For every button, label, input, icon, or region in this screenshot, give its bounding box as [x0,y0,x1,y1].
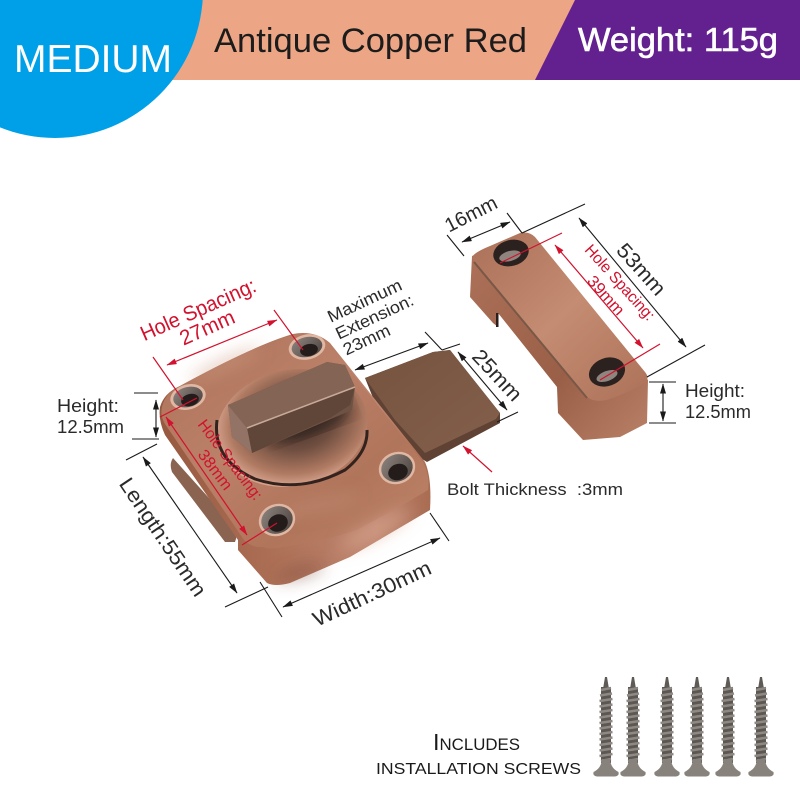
badge: blue quarter circle [0,0,203,138]
includes label: INSTALLATION SCREWS [376,761,581,778]
strike top face [472,232,648,401]
dimension: strike width 16mm [441,192,585,256]
dimension: maximum extension: 23mm [340,321,393,359]
dimension: hole spacing 39mm: 39mm [583,273,627,319]
dimension: maximum extension [324,276,442,370]
bolt [365,350,500,462]
dimension: strike length 53mm [579,218,705,377]
plate top face [161,334,428,548]
dimension: bolt width 25mm [442,344,526,422]
callout: bolt thickness: Bolt Thickness :3mm [447,481,623,499]
dimension: hole spacing 27mm [137,274,303,417]
dimension: height left: 12.5mm [57,416,124,437]
dimension: length 55mm: Length:55mm [114,474,211,601]
dimension: length 55mm [114,444,268,607]
dimension: hole spacing 39mm [500,233,660,380]
dimension: height left: Height: [57,395,119,416]
screws [593,677,774,776]
dimension: hole spacing 39mm: Hole Spacing: [581,242,658,324]
strike holes [490,236,629,391]
top banner: peach band [150,0,580,80]
strike edge [474,262,587,398]
dimension: width 30mm [260,513,449,632]
dimension: height right: Height: [685,380,745,401]
strike plate [470,232,648,440]
includes label [376,729,581,778]
knob recess shadow [216,420,367,485]
dimension: strike width 16mm: 16mm [441,192,501,237]
latch body [160,331,500,585]
dimension: hole spacing 38mm [166,417,277,545]
knob dome [206,355,378,501]
knob handle [228,362,355,453]
strike side [470,240,648,440]
dimension: height left [57,393,159,439]
plate rim [160,333,430,585]
dimension: hole spacing 27mm: 27mm [176,306,239,350]
strike notch [496,313,498,327]
dimension: hole spacing 38mm: 38mm [194,447,235,494]
top banner: purple band [535,0,800,80]
includes label: INCLUDES [433,729,520,755]
dimension: width 30mm: Width:30mm [309,557,435,632]
plate shading [186,343,414,583]
dimension: maximum extension: Maximum [324,276,405,327]
knob shading [266,392,354,448]
dimension: strike length 53mm: 53mm [612,239,670,300]
dimension: hole spacing 38mm: Hole Spacing: [194,417,265,504]
screw holes [167,331,420,541]
dimension: height right: 12.5mm [685,401,751,422]
dimension: maximum extension: Extension: [333,291,417,343]
colour name: Antique Copper Red [214,22,527,60]
slide tab on left [171,458,236,542]
callout: bolt thickness [447,446,623,499]
dimension: height right [649,380,751,423]
dimension: hole spacing 27mm: Hole Spacing: [137,274,260,346]
weight: Weight: 115g [578,21,778,58]
dimension: bolt width 25mm: 25mm [467,345,526,406]
badge text: MEDIUM [14,38,172,81]
